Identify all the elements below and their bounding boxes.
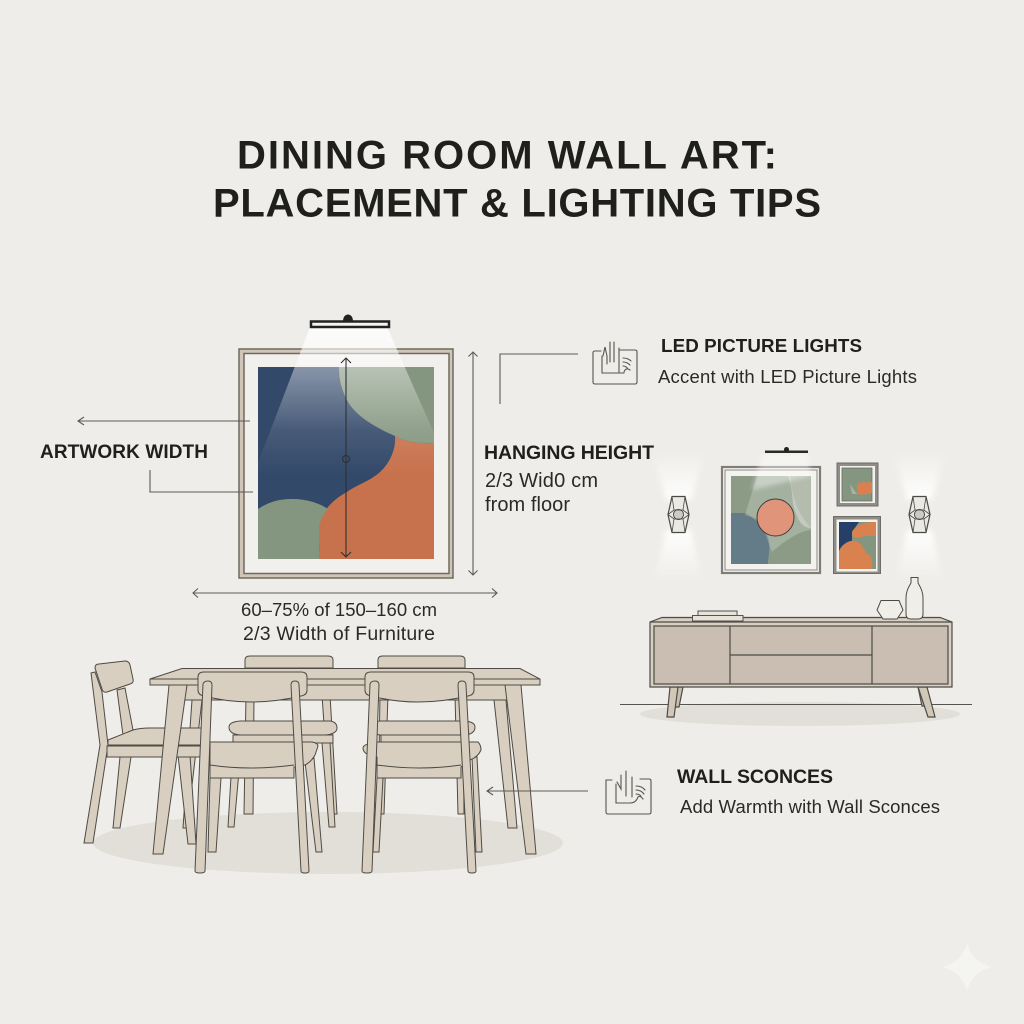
label: hanging height [484,442,654,516]
books [692,611,743,621]
title [213,134,821,226]
title: DINING ROOM WALL ART: [237,134,777,178]
artwork height arrow [341,358,351,557]
gallery: small picture light [765,447,808,453]
callout: wall sconces: WALL SCONCES [677,766,833,788]
icon: wall sconces [606,771,651,814]
left wall sconce [652,452,705,582]
front chair left [195,672,322,873]
leader: LED picture lights [500,354,578,404]
dining table [150,668,540,854]
sideboard [650,618,952,717]
front chair right [362,672,482,873]
callout: wall sconces [677,766,940,817]
floor line and sideboard shadow [620,702,972,726]
table back legs [183,700,517,828]
hanging height arrow [468,352,478,575]
callout: wall sconces: Add Warmth with Wall Sconces [680,796,940,817]
gallery: lower-right frame [834,516,880,574]
label: width measurements: 60–75% of 150–160 cm [241,599,437,620]
decorative star [942,943,992,991]
label: artwork width: ARTWORK WIDTH [40,442,208,463]
wall sconces arrow [487,787,588,795]
label: width measurements: 2/3 Width of Furniture [243,623,435,645]
callout: LED picture lights [658,335,917,387]
label: hanging height: HANGING HEIGHT [484,442,654,464]
label: width measurements [241,599,437,645]
side chair [84,661,202,844]
label: hanging height: from floor [485,494,570,516]
picture light [311,314,389,327]
floor shadow under table [93,812,563,874]
gallery: small top-right frame [837,463,878,506]
callout: LED picture lights: Accent with LED Picture Lights [658,366,917,387]
vases [877,578,923,619]
back chair left [228,656,337,827]
title: PLACEMENT & LIGHTING TIPS [213,182,821,226]
artwork width leaders [78,417,253,492]
back chair right [370,656,475,814]
width arrow [193,588,497,598]
right wall sconce [893,452,946,582]
callout: LED picture lights: LED PICTURE LIGHTS [661,335,862,356]
main framed artwork [239,327,453,578]
gallery: large framed art [722,454,820,573]
icon: LED picture lights [593,342,637,384]
label: hanging height: 2/3 Wid0 cm [485,470,598,492]
